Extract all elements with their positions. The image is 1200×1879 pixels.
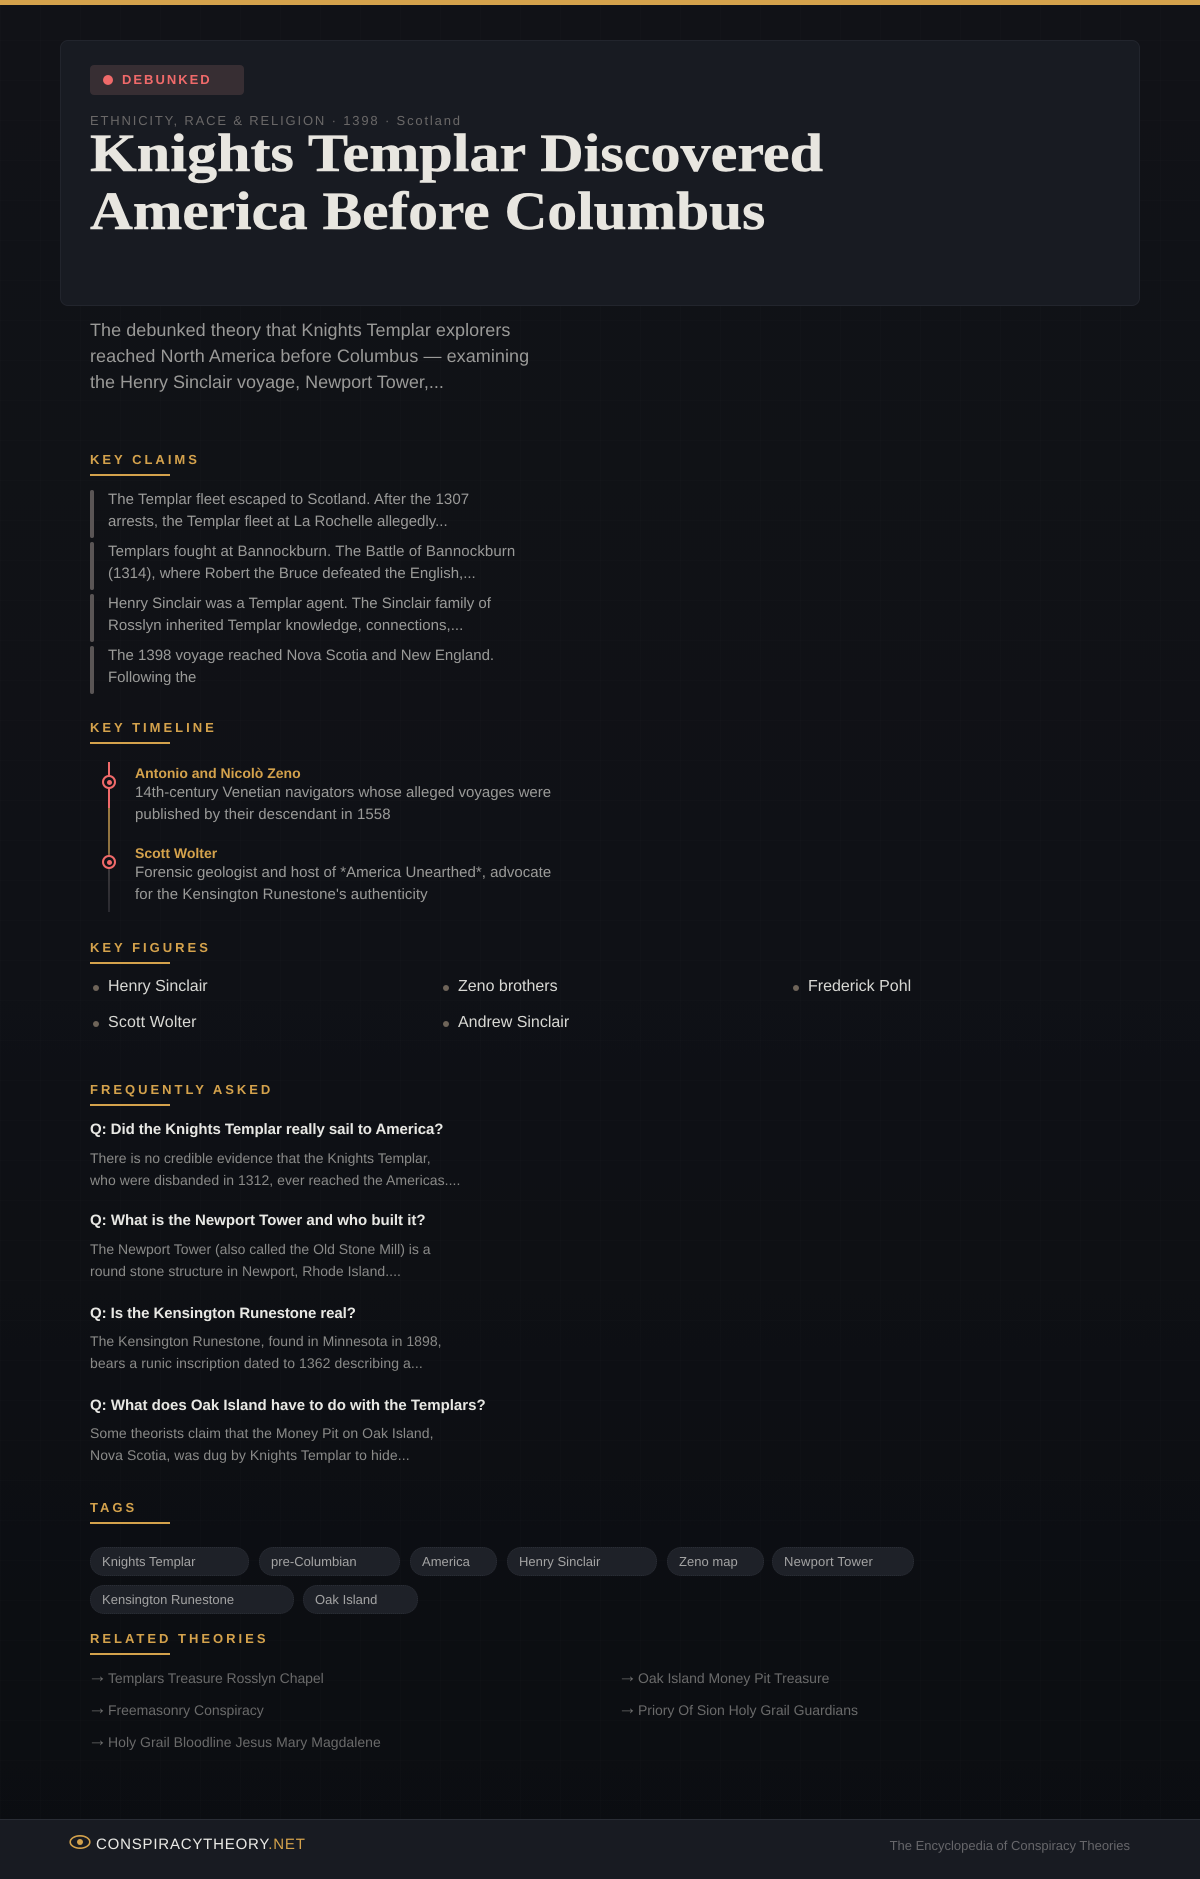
heading: key timeline: KEY TIMELINE bbox=[90, 720, 217, 735]
figure: Henry Sinclair: Henry Sinclair bbox=[108, 978, 208, 995]
faq 4: Some theorists claim that the Money Pit on Oak Island, bbox=[90, 1425, 434, 1441]
related link 5 bbox=[618, 1698, 858, 1719]
heading: related theories: RELATED THEORIES bbox=[90, 1631, 268, 1646]
claim 3 bbox=[90, 594, 491, 642]
category meta line: ETHNICITY, RACE & RELIGION · 1398 · Scotland bbox=[90, 113, 462, 128]
faq 1 bbox=[90, 1121, 460, 1188]
faq 3: The Kensington Runestone, found in Minnesota in 1898, bbox=[90, 1333, 442, 1349]
related link 1: → bbox=[88, 1666, 107, 1687]
claim 1: arrests, the Templar fleet at La Rochelle allegedly... bbox=[108, 513, 448, 530]
tag: Henry Sinclair: Henry Sinclair bbox=[519, 1554, 600, 1569]
tag: Newport Tower: Newport Tower bbox=[784, 1554, 873, 1569]
claim 3: Rosslyn inherited Templar knowledge, connections,... bbox=[108, 617, 463, 634]
tag: Kensington Runestone: Kensington Runestone bbox=[102, 1592, 234, 1607]
faq 2: round stone structure in Newport, Rhode Island.... bbox=[90, 1263, 401, 1279]
related link 3: → bbox=[88, 1730, 107, 1751]
related link 2 bbox=[88, 1698, 264, 1719]
faq 1: Q: Did the Knights Templar really sail to America? bbox=[90, 1121, 443, 1138]
tag: America bbox=[410, 1547, 497, 1576]
faq 2 bbox=[90, 1212, 431, 1279]
timeline entry 2: Forensic geologist and host of *America Unearthed*, advocate bbox=[135, 864, 551, 881]
related link 2: Freemasonry Conspiracy bbox=[108, 1702, 264, 1718]
related link 1 bbox=[88, 1666, 324, 1687]
top accent bar bbox=[0, 0, 1200, 5]
lede text bbox=[90, 320, 529, 392]
claim 4 bbox=[90, 646, 494, 694]
tag: Knights Templar bbox=[90, 1547, 249, 1576]
timeline entry 1: 14th-century Venetian navigators whose alleged voyages were bbox=[135, 784, 551, 801]
faq 3: Q: Is the Kensington Runestone real? bbox=[90, 1305, 356, 1322]
claim 2: (1314), where Robert the Bruce defeated the English,... bbox=[108, 565, 476, 582]
tag: Henry Sinclair bbox=[507, 1547, 657, 1576]
timeline entry 2: for the Kensington Runestone's authenticity bbox=[135, 886, 428, 903]
section: tags bbox=[90, 1500, 914, 1614]
heading: key figures: KEY FIGURES bbox=[90, 940, 211, 955]
timeline entry 2 bbox=[135, 845, 551, 903]
faq 2: Q: What is the Newport Tower and who built it? bbox=[90, 1212, 426, 1229]
icon: status dot bbox=[103, 75, 113, 85]
claim 2: Templars fought at Bannockburn. The Battle of Bannockburn bbox=[108, 543, 515, 560]
tag: Oak Island bbox=[303, 1585, 418, 1614]
related link 4: → bbox=[618, 1666, 637, 1687]
tag: Knights Templar: Knights Templar bbox=[102, 1554, 195, 1569]
footer tagline: The Encyclopedia of Conspiracy Theories bbox=[890, 1838, 1130, 1853]
heading: frequently asked: FREQUENTLY ASKED bbox=[90, 1082, 273, 1097]
panel: header card bbox=[60, 40, 1140, 306]
tag: Zeno map: Zeno map bbox=[679, 1554, 738, 1569]
faq 2: The Newport Tower (also called the Old Stone Mill) is a bbox=[90, 1241, 431, 1257]
timeline entry 1 bbox=[135, 765, 551, 823]
title bbox=[90, 123, 823, 241]
timeline node 2 bbox=[102, 855, 116, 869]
faq 3 bbox=[90, 1305, 442, 1371]
related link 5: → bbox=[618, 1698, 637, 1719]
timeline entry 1: published by their descendant in 1558 bbox=[135, 806, 391, 823]
related link 4 bbox=[618, 1666, 829, 1687]
timeline entry 2: Scott Wolter bbox=[135, 845, 217, 861]
heading: key claims: KEY CLAIMS bbox=[90, 452, 200, 467]
section: key timeline bbox=[90, 720, 551, 912]
faq 3: bears a runic inscription dated to 1362 describing a... bbox=[90, 1355, 423, 1371]
related link 3: Holy Grail Bloodline Jesus Mary Magdalene bbox=[108, 1734, 381, 1750]
tag: America: America bbox=[422, 1554, 470, 1569]
claim 1: The Templar fleet escaped to Scotland. After the 1307 bbox=[108, 491, 469, 508]
claim 2 bbox=[90, 542, 515, 590]
tag: Oak Island: Oak Island bbox=[315, 1592, 377, 1607]
faq 4 bbox=[90, 1397, 486, 1463]
title: Knights Templar Discovered bbox=[90, 123, 823, 183]
faq 1: There is no credible evidence that the Knights Templar, bbox=[90, 1150, 431, 1166]
section: key figures bbox=[90, 940, 911, 1031]
tag: pre-Columbian bbox=[259, 1547, 400, 1576]
section: related theories bbox=[88, 1631, 858, 1751]
claim 4: The 1398 voyage reached Nova Scotia and New England. bbox=[108, 647, 494, 664]
timeline line bbox=[108, 762, 110, 912]
lede text: the Henry Sinclair voyage, Newport Tower,... bbox=[90, 372, 444, 392]
lede text: reached North America before Columbus — examining bbox=[90, 346, 529, 366]
badge label: DEBUNKED bbox=[122, 72, 212, 87]
related link 5: Priory Of Sion Holy Grail Guardians bbox=[638, 1702, 858, 1718]
figure: Frederick Pohl: Frederick Pohl bbox=[808, 978, 911, 995]
claim 1 bbox=[90, 490, 469, 538]
claim 4: Following the bbox=[108, 669, 196, 686]
figure: Andrew Sinclair: Andrew Sinclair bbox=[458, 1014, 569, 1031]
icon: eye logo bbox=[69, 1835, 91, 1849]
section: key claims bbox=[90, 452, 515, 694]
related link 2: → bbox=[88, 1698, 107, 1719]
related link 4: Oak Island Money Pit Treasure bbox=[638, 1670, 829, 1686]
logo wordmark: CONSPIRACYTHEORY.NET bbox=[96, 1836, 306, 1853]
faq 1: who were disbanded in 1312, ever reached the Americas.... bbox=[90, 1172, 460, 1188]
tag: Zeno map bbox=[667, 1547, 764, 1576]
tag: pre-Columbian: pre-Columbian bbox=[271, 1554, 357, 1569]
title: America Before Columbus bbox=[90, 181, 765, 241]
faq 4: Nova Scotia, was dug by Knights Templar to hide... bbox=[90, 1447, 410, 1463]
timeline entry 1: Antonio and Nicolò Zeno bbox=[135, 765, 301, 781]
claim 3: Henry Sinclair was a Templar agent. The Sinclair family of bbox=[108, 595, 491, 612]
lede text: The debunked theory that Knights Templar explorers bbox=[90, 320, 510, 340]
badge: debunked bbox=[90, 65, 244, 95]
tag: Kensington Runestone bbox=[90, 1585, 294, 1614]
heading: tags: TAGS bbox=[90, 1500, 137, 1515]
faq 4: Q: What does Oak Island have to do with the Templars? bbox=[90, 1397, 486, 1414]
tag: Newport Tower bbox=[772, 1547, 914, 1576]
timeline node 1 bbox=[102, 775, 116, 789]
footer bbox=[0, 1819, 1200, 1879]
related link 1: Templars Treasure Rosslyn Chapel bbox=[108, 1670, 324, 1686]
section: frequently asked bbox=[90, 1082, 486, 1463]
figure: Zeno brothers: Zeno brothers bbox=[458, 978, 558, 995]
figure: Scott Wolter: Scott Wolter bbox=[108, 1014, 197, 1031]
